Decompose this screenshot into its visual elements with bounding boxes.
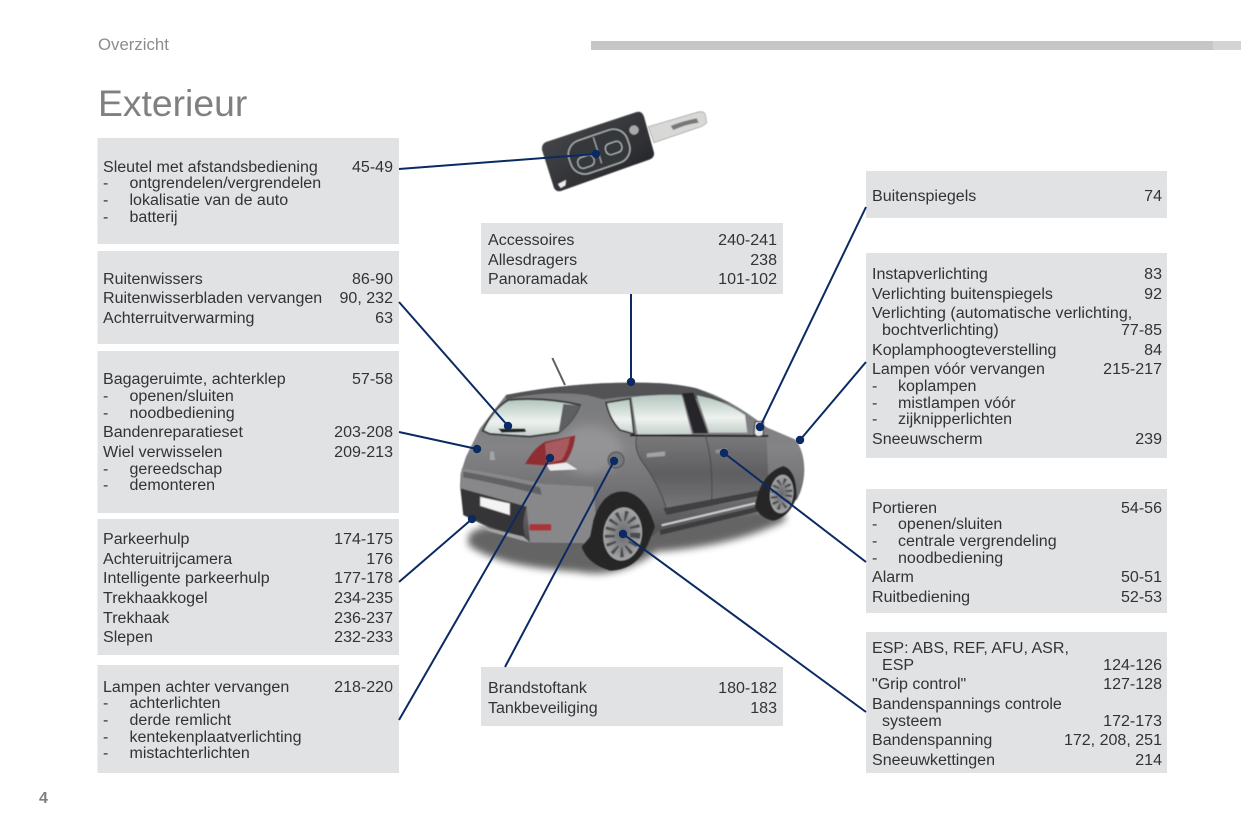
section label: Overzicht [98, 35, 169, 54]
panel: lighting [866, 253, 1167, 458]
panel: accessories [481, 223, 783, 294]
panel: ESP and tyres: 124-126 [1103, 656, 1162, 674]
panel: doors: - [872, 549, 877, 567]
callout: luggage [399, 432, 477, 449]
panel: lighting: Instapverlichting [872, 265, 988, 283]
panel: ESP and tyres: ESP [882, 656, 914, 674]
wiper [498, 429, 526, 433]
callout: doors [724, 453, 866, 562]
panel: wipers: 86-90 [352, 270, 393, 288]
callout: wipers [399, 302, 508, 426]
panel: ESP and tyres: Bandenspanning [872, 731, 992, 749]
panel: accessories: Allesdragers [488, 251, 577, 269]
panel: mirrors [866, 171, 1167, 218]
number plate [480, 497, 510, 515]
panel: lighting: 215-217 [1103, 360, 1162, 378]
panel: parking: Trekhaakkogel [103, 589, 208, 607]
panel: key: - [103, 174, 108, 192]
panel: parking: 232-233 [334, 628, 393, 646]
panel: rear lamps: mistachterlichten [130, 744, 250, 762]
panel: parking: Intelligente parkeerhulp [103, 569, 270, 587]
panel: fuel: Tankbeveiliging [488, 699, 598, 717]
panel: lighting: - [872, 394, 877, 412]
panel: mirrors: 74 [1144, 187, 1162, 205]
panel: luggage: - [103, 476, 108, 494]
panel: key: - [103, 208, 108, 226]
car body [460, 383, 804, 544]
panel: mirrors: Buitenspiegels [872, 187, 976, 205]
panel: ESP and tyres: 127-128 [1103, 675, 1162, 693]
panel: doors: - [872, 532, 877, 550]
panel: luggage: noodbediening [130, 404, 235, 422]
rear quarter highlight [558, 425, 622, 475]
side windows [606, 399, 634, 434]
panel: wipers: Ruitenwisserbladen vervangen [103, 289, 322, 307]
panel: parking: Parkeerhulp [103, 530, 190, 548]
panel: luggage: Wiel verwisselen [103, 443, 222, 461]
panel: ESP and tyres: ESP: ABS, REF, AFU, ASR, [872, 639, 1069, 657]
panel: rear lamps: - [103, 711, 108, 729]
panel: key: batterij [130, 208, 178, 226]
panel: lighting: - [872, 410, 877, 428]
panel: lighting: koplampen [898, 377, 976, 395]
panel: parking: 234-235 [334, 589, 393, 607]
panel: ESP and tyres: 214 [1135, 751, 1162, 769]
panel: fuel [481, 667, 783, 726]
panel: luggage: Bandenreparatieset [103, 423, 243, 441]
panel: doors: noodbediening [898, 549, 1003, 567]
illustration: car [460, 358, 804, 574]
panel: doors: centrale vergrendeling [898, 532, 1057, 550]
lion badge [490, 452, 495, 460]
panel: rear lamps: - [103, 728, 108, 746]
panel: doors: Alarm [872, 568, 914, 586]
panel: parking: 176 [366, 550, 393, 568]
panel: parking: Achteruitrijcamera [103, 550, 232, 568]
panel: luggage: 209-213 [334, 443, 393, 461]
panel: luggage: 203-208 [334, 423, 393, 441]
panel: rear lamps: Lampen achter vervangen [103, 678, 289, 696]
callout: lighting [800, 362, 866, 440]
tail lamp [525, 435, 577, 471]
title: Exterieur [98, 82, 247, 124]
panel: luggage: openen/sluiten [130, 387, 234, 405]
panel: parking: 174-175 [334, 530, 393, 548]
panel: lighting: 83 [1144, 265, 1162, 283]
panel: key: 45-49 [352, 158, 393, 176]
roof dark strip [506, 383, 730, 403]
panel: parking: 236-237 [334, 609, 393, 627]
icon: remote key [542, 112, 707, 191]
panel: ESP and tyres: 172-173 [1103, 712, 1162, 730]
panel: lighting: Lampen vóór vervangen [872, 360, 1045, 378]
rear fog lamp [529, 524, 551, 531]
panel: lighting: 84 [1144, 341, 1162, 359]
panel: lighting: Verlichting buitenspiegels [872, 285, 1053, 303]
mirror [754, 421, 763, 436]
panel: luggage: - [103, 387, 108, 405]
panel: accessories: 101-102 [718, 270, 777, 288]
panel: doors: - [872, 515, 877, 533]
panel: lighting: zijknipperlichten [898, 410, 1012, 428]
panel: wipers: 90, 232 [340, 289, 393, 307]
panel: luggage [98, 351, 399, 513]
callout lines and dots [399, 154, 866, 720]
callout: fuel [505, 461, 614, 667]
panel: fuel: Brandstoftank [488, 679, 588, 697]
panel: wipers: 63 [375, 309, 393, 327]
panel: parking: Trekhaak [103, 609, 170, 627]
panel: lighting: 239 [1135, 430, 1162, 448]
front wheel [755, 466, 797, 521]
callout: parking [399, 519, 472, 582]
callout dots [468, 150, 804, 538]
fuel flap [608, 452, 624, 468]
panel: rear lamps: - [103, 694, 108, 712]
car shadow [468, 508, 785, 574]
panel: ESP and tyres: "Grip control" [872, 675, 967, 693]
door lines [636, 435, 712, 510]
panel: doors: 50-51 [1121, 568, 1162, 586]
panel: doors: Ruitbediening [872, 588, 970, 606]
door panels [636, 437, 768, 511]
panel: lighting: Verlichting (automatische verlichting, [872, 304, 1132, 322]
panel: wipers: Achterruitverwarming [103, 309, 254, 327]
panel: key [98, 138, 399, 244]
panel: luggage: 57-58 [352, 370, 393, 388]
panel: lighting: Koplamphoogteverstelling [872, 341, 1056, 359]
panel: fuel: 180-182 [718, 679, 777, 697]
top bar [591, 41, 1241, 50]
panel: doors [866, 489, 1167, 613]
panel: parking: 177-178 [334, 569, 393, 587]
rear window [483, 399, 580, 437]
panel: key: ontgrendelen/vergrendelen [130, 174, 321, 192]
panel: ESP and tyres: systeem [882, 712, 942, 730]
bumper [461, 468, 597, 543]
panel: key: lokalisatie van de auto [130, 191, 288, 209]
panel: doors: 52-53 [1121, 588, 1162, 606]
panel: ESP and tyres [866, 632, 1167, 773]
panel: ESP and tyres: 172, 208, 251 [1064, 731, 1162, 749]
panel: ESP and tyres: Sneeuwkettingen [872, 751, 995, 769]
panel: doors: Portieren [872, 499, 937, 517]
panel: luggage: gereedschap [130, 460, 222, 478]
callout: mirrors [760, 207, 866, 427]
panel: doors: 54-56 [1121, 499, 1162, 517]
panel: accessories: Panoramadak [488, 270, 589, 288]
callout: accessories [630, 294, 632, 382]
panel: key: - [103, 191, 108, 209]
panel: accessories: 240-241 [718, 231, 777, 249]
panel: accessories: Accessoires [488, 231, 574, 249]
panel: wipers [98, 251, 399, 344]
panel: lighting: mistlampen vóór [898, 394, 1016, 412]
panel: lighting: - [872, 377, 877, 395]
rear wheel arch and wheel [582, 491, 655, 571]
panel: rear lamps [98, 665, 399, 773]
panel: fuel: 183 [750, 699, 777, 717]
panel: accessories: 238 [750, 251, 777, 269]
callout: key [399, 154, 596, 169]
callout: tyres [623, 534, 866, 712]
panel: luggage: - [103, 404, 108, 422]
panel: ESP and tyres: Bandenspannings controle [872, 695, 1062, 713]
panel: doors: openen/sluiten [898, 515, 1002, 533]
panel: lighting: 77-85 [1121, 321, 1162, 339]
panel: luggage: demonteren [130, 476, 215, 494]
page number: 4 [39, 790, 48, 807]
panel: luggage: - [103, 460, 108, 478]
panel: lighting: bochtverlichting) [882, 321, 999, 339]
panel: wipers: Ruitenwissers [103, 270, 203, 288]
panel: key: Sleutel met afstandsbediening [103, 158, 318, 176]
panel: luggage: Bagageruimte, achterklep [103, 370, 286, 388]
panel: rear lamps: achterlichten [130, 694, 220, 712]
antenna [552, 358, 565, 385]
panel: rear lamps: derde remlicht [130, 711, 232, 729]
panel: rear lamps: 218-220 [334, 678, 393, 696]
panel: lighting: 92 [1144, 285, 1162, 303]
callout: rear lamps [399, 458, 550, 720]
panel: parking [98, 519, 399, 655]
panel: rear lamps: - [103, 744, 108, 762]
panel: lighting: Sneeuwscherm [872, 430, 982, 448]
panel: rear lamps: kentekenplaatverlichting [130, 728, 302, 746]
panel: parking: Slepen [103, 628, 153, 646]
